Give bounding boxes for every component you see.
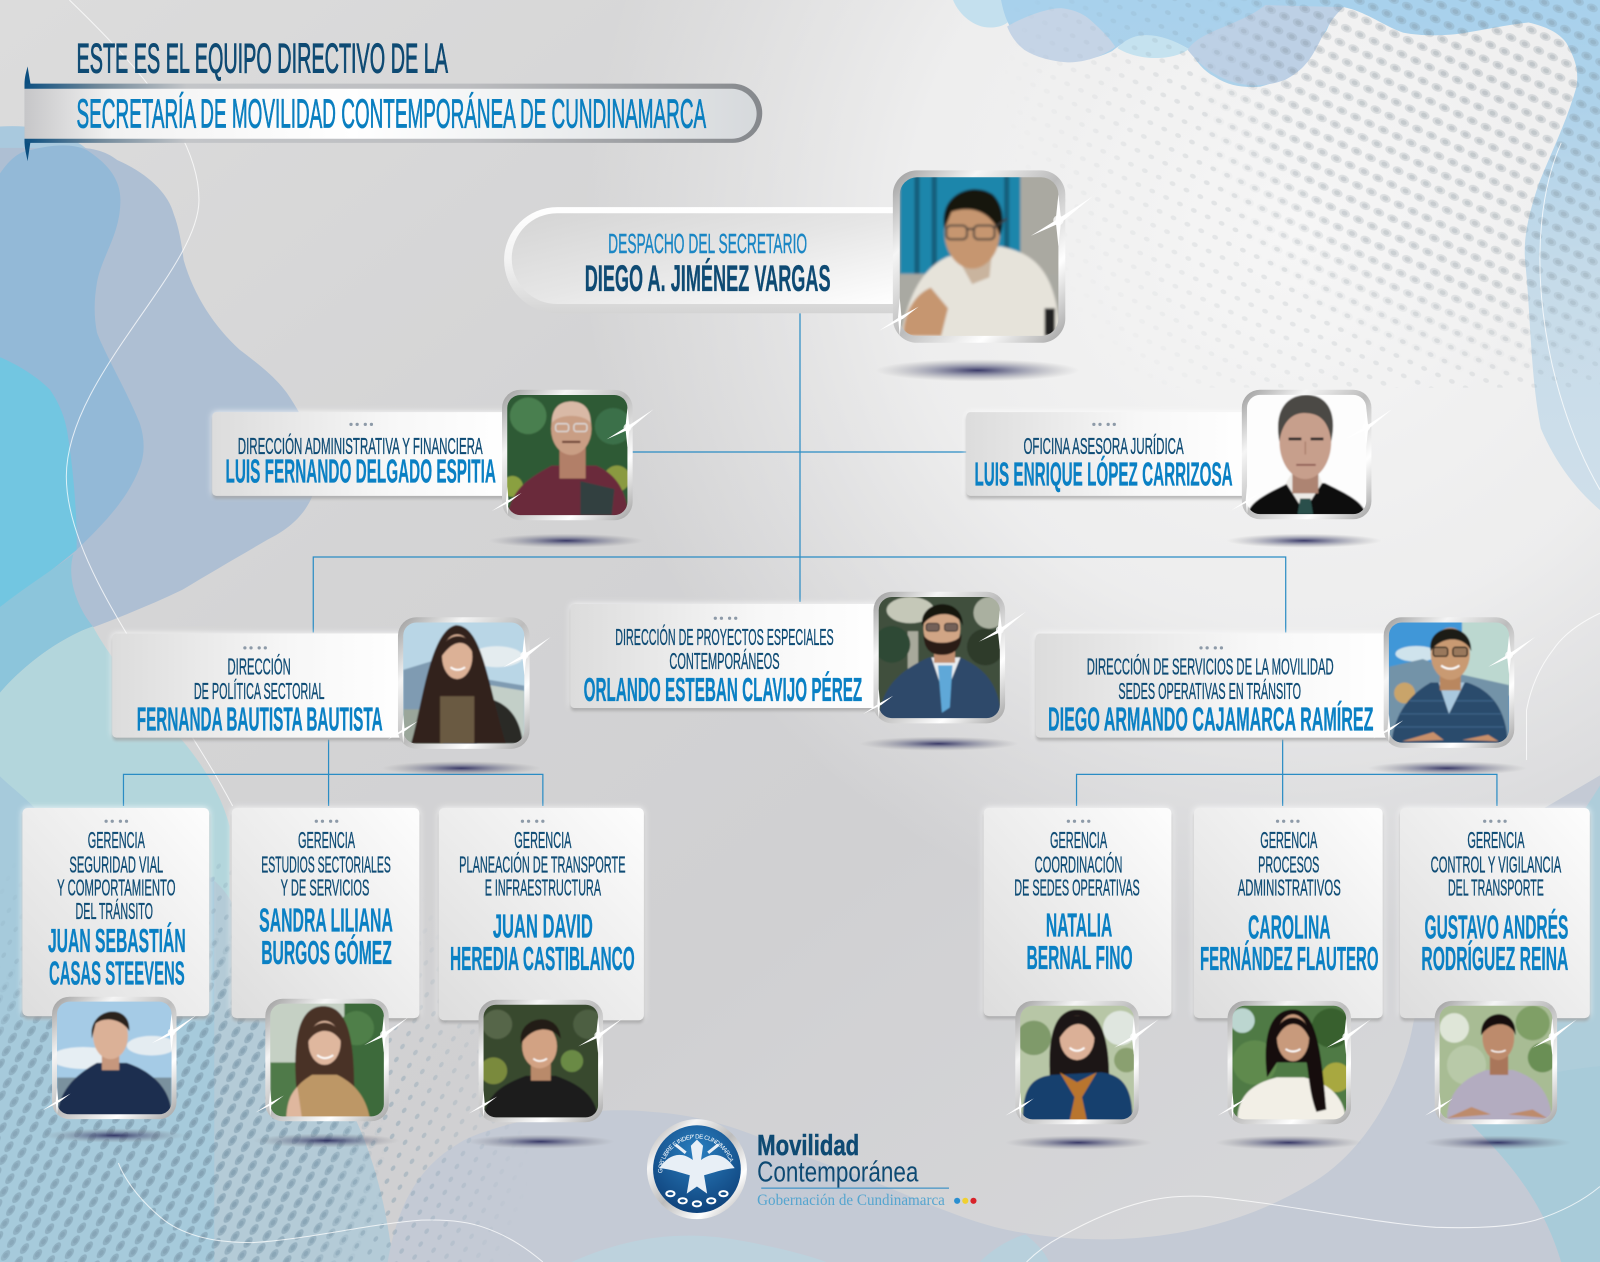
role <box>459 827 626 901</box>
role <box>194 653 324 704</box>
text: HEREDIA CASTIBLANCO <box>450 941 635 978</box>
dots <box>1199 646 1223 649</box>
role: DEL TRÁNSITO <box>76 898 153 924</box>
dots <box>521 820 544 823</box>
name <box>450 909 635 978</box>
role: E INFRAESTRUCTURA <box>485 875 601 901</box>
role <box>261 827 391 901</box>
role: GERENCIA <box>1260 827 1318 853</box>
panel: oficina asesora jurídica: OFICINA ASESORA JURÍDICA <box>1023 433 1184 459</box>
photo: Juan David Heredia <box>467 1000 623 1149</box>
role: SEDES OPERATIVAS EN TRÁNSITO <box>1118 678 1301 704</box>
panel: gerencia seguridad vial: JUAN SEBASTIÁN <box>48 922 186 960</box>
panel: oficina asesora jurídica <box>966 412 1250 496</box>
role <box>1431 827 1561 901</box>
role: GERENCIA <box>1050 827 1107 853</box>
panel: gerencia seguridad vial <box>22 808 209 1016</box>
text: LUIS FERNANDO DELGADO ESPITIA <box>226 454 496 491</box>
name: JUAN DAVID <box>493 909 593 946</box>
title <box>24 34 762 161</box>
dots <box>1067 820 1090 823</box>
panel: gerencia procesos administrativos <box>1194 808 1383 1018</box>
panel: gerencia coordinación de sedes: DE SEDES OPERATIVAS <box>1014 875 1140 901</box>
role: Y DE SERVICIOS <box>281 875 369 901</box>
name <box>259 902 393 972</box>
connector lines <box>123 313 1497 806</box>
role <box>1087 653 1334 704</box>
panel: gerencia estudios sectoriales: ESTUDIOS SECTORIALES <box>261 851 391 877</box>
panel: gerencia coordinación de sedes <box>984 808 1171 1016</box>
panel: dirección de política sectorial: DE POLÍTICA SECTORIAL <box>194 678 324 704</box>
name <box>1027 908 1133 977</box>
dots <box>349 423 373 426</box>
role: SEGURIDAD VIAL <box>69 851 163 877</box>
role: GERENCIA <box>298 827 355 853</box>
panel: gerencia planeación de transporte: PLANEACIÓN DE TRANSPORTE <box>459 851 626 877</box>
logo: seal: GOB' LIBRE E INDEP' DE CUND/MARCA <box>658 1134 734 1173</box>
panel: gerencia estudios sectoriales: SANDRA LILIANA <box>259 902 393 939</box>
title: ESTE ES EL EQUIPO DIRECTIVO DE LA <box>77 34 448 81</box>
logo: wordmark: Gobernación de Cundinamarca <box>757 1192 945 1209</box>
logo: seal <box>647 1119 747 1220</box>
role <box>1238 827 1341 901</box>
role: PROCESOS <box>1258 851 1319 877</box>
panel: despacho del secretario <box>504 207 903 313</box>
panel: gerencia estudios sectoriales <box>232 808 419 1018</box>
role <box>615 624 834 674</box>
photo: Juan Sebastián Casas <box>42 997 196 1143</box>
logo: wordmark: Contemporánea <box>757 1156 918 1188</box>
name: CAROLINA <box>1248 910 1331 947</box>
panel: gerencia seguridad vial: CASAS STEEVENS <box>49 956 185 993</box>
role <box>1014 827 1140 901</box>
logo: wordmark <box>757 1130 977 1209</box>
role: GERENCIA <box>88 827 145 853</box>
panel: dirección de política sectorial: FERNANDA BAUTISTA BAUTISTA <box>137 701 383 738</box>
role: GERENCIA <box>1467 827 1525 853</box>
photo: Luis Fernando Delgado <box>489 390 654 548</box>
title ribbon <box>24 66 762 161</box>
dots <box>1483 820 1507 823</box>
panel: gerencia control y vigilancia <box>1400 808 1590 1018</box>
panel: gerencia estudios sectoriales: BURGOS GÓMEZ <box>261 934 392 972</box>
dots <box>243 646 267 649</box>
photo: Sandra Burgos <box>253 999 409 1148</box>
panel: gerencia coordinación de sedes: BERNAL FINO <box>1027 940 1133 977</box>
photo: Orlando Clavijo <box>859 592 1026 751</box>
panel: dirección administrativa: DIRECCIÓN ADMINISTRATIVA Y FINANCIERA <box>238 433 483 459</box>
panel: gerencia procesos administrativos: ADMINISTRATIVOS <box>1238 875 1341 901</box>
panel: dirección de proyectos especiales <box>570 604 883 709</box>
role: DESPACHO DEL SECRETARIO <box>608 228 807 259</box>
dots <box>714 617 737 620</box>
photo: Diego Cajamarca <box>1367 617 1535 775</box>
role: DIRECCIÓN <box>228 653 291 679</box>
panel: dirección de servicios: DIRECCIÓN DE SERVICIOS DE LA MOVILIDAD <box>1087 653 1334 679</box>
panel: gerencia seguridad vial: Y COMPORTAMIENTO <box>57 875 176 901</box>
name: NATALIA <box>1046 908 1112 945</box>
title: SECRETARÍA DE MOVILIDAD CONTEMPORÁNEA DE CUNDINAMARCA <box>77 91 706 137</box>
role: GERENCIA <box>514 827 572 853</box>
photo: Diego Jiménez <box>876 170 1093 382</box>
photo: Natalia Bernal <box>1005 1001 1159 1150</box>
dots <box>315 820 338 823</box>
text: LUIS ENRIQUE LÓPEZ CARRIZOSA <box>974 456 1233 494</box>
photo: Fernanda Bautista <box>382 617 551 775</box>
dots <box>1276 820 1300 823</box>
logo: wordmark: Movilidad <box>757 1130 859 1162</box>
panel: gerencia planeación de transporte <box>439 808 644 1020</box>
panel: dirección de política sectorial <box>112 634 408 738</box>
dots <box>1092 423 1116 426</box>
panel: dirección de proyectos especiales: DIRECCIÓN DE PROYECTOS ESPECIALES <box>615 624 834 650</box>
photo: Gustavo Rodríguez <box>1424 1001 1577 1150</box>
photo: Luis Enrique López <box>1227 390 1392 548</box>
role <box>57 827 176 924</box>
dots <box>104 820 128 823</box>
name <box>1421 909 1568 978</box>
panel: despacho del secretario: DIEGO A. JIMÉNEZ VARGAS <box>585 258 831 299</box>
photo: Carolina Fernández <box>1215 1001 1371 1150</box>
text: FERNÁNDEZ FLAUTERO <box>1200 940 1379 978</box>
text: ORLANDO ESTEBAN CLAVIJO PÉREZ <box>584 671 862 709</box>
panel: dirección de servicios <box>1036 634 1393 738</box>
role: CONTEMPORÁNEOS <box>669 648 780 674</box>
role: COORDINACIÓN <box>1035 851 1122 877</box>
panel: dirección administrativa <box>212 412 510 496</box>
name <box>48 922 186 993</box>
name <box>1200 910 1379 978</box>
